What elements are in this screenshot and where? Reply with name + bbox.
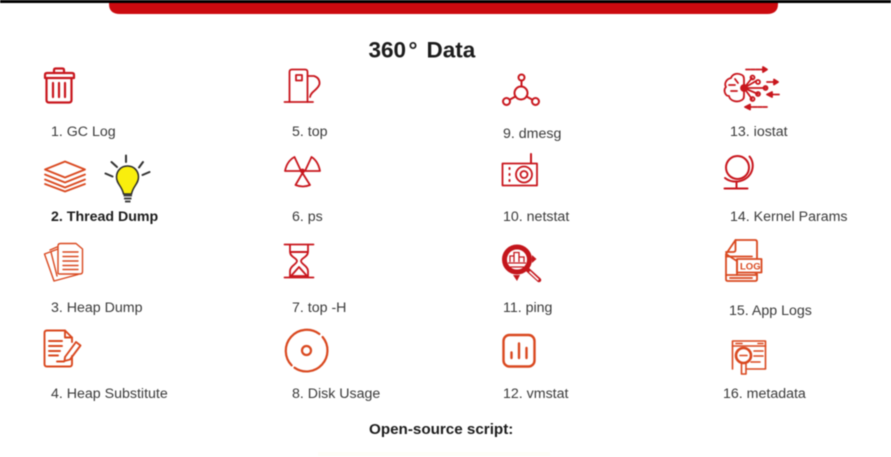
label: 10. netstat — [503, 209, 569, 225]
item 11: ping — [503, 247, 552, 316]
item 12: vmstat — [503, 335, 569, 402]
item 7: top -H — [284, 244, 346, 316]
icon: trash can — [45, 68, 74, 102]
label: 7. top -H — [292, 300, 346, 316]
item 9: dmesg — [503, 74, 561, 142]
icon: three-node network — [503, 74, 539, 105]
label: 6. ps — [292, 209, 323, 225]
item 5: top — [284, 70, 328, 140]
icon: document stack — [44, 244, 82, 281]
icon: magnifier with chart — [504, 247, 539, 281]
item 8: Disk Usage — [286, 330, 380, 402]
item 4: Heap Substitute — [44, 330, 168, 402]
label: 3. Heap Dump — [51, 300, 143, 316]
icon: layers — [45, 162, 85, 192]
title: 360 — [368, 38, 406, 62]
icon: disk — [286, 330, 327, 371]
label: 15. App Logs — [729, 303, 812, 319]
label: 9. dmesg — [503, 126, 561, 142]
icon: radio — [502, 154, 537, 186]
label: 2. Thread Dump — [51, 209, 159, 225]
item 16: metadata — [723, 341, 806, 402]
icon: bar chart tile — [504, 335, 534, 366]
label: 5. top — [292, 124, 328, 140]
item 3: Heap Dump — [44, 244, 143, 316]
label: 1. GC Log — [51, 124, 116, 140]
red header bar — [109, 3, 778, 14]
item 1: GC Log — [45, 68, 116, 140]
label: 14. Kernel Params — [730, 209, 848, 225]
item 6: ps — [285, 157, 323, 225]
icon: fuel pump — [284, 70, 320, 102]
title: Data — [426, 38, 476, 62]
label: 4. Heap Substitute — [51, 386, 168, 402]
label: 11. ping — [503, 300, 552, 316]
icon: light bulb — [106, 156, 150, 202]
title: ° — [408, 38, 418, 62]
label: 16. metadata — [723, 386, 806, 402]
icon: log file: LOG — [740, 262, 761, 272]
icon: browser window with magnifier — [732, 341, 766, 374]
icon: brain with arrows — [725, 67, 779, 110]
item 2: Thread Dump — [45, 156, 159, 225]
label: 12. vmstat — [503, 386, 569, 402]
item 10: netstat — [502, 154, 569, 225]
icon: radiation symbol — [285, 157, 320, 186]
icon: document with pen — [44, 330, 80, 366]
icon: hourglass — [284, 244, 314, 278]
item 15: App Logs — [726, 240, 812, 319]
faint bottom link strip — [318, 452, 550, 456]
item 14: Kernel Params — [724, 156, 848, 225]
open-source script heading: Open-source script: — [369, 421, 513, 438]
icon: desk globe — [724, 156, 753, 188]
item 13: iostat — [725, 67, 788, 140]
label: 8. Disk Usage — [292, 386, 380, 402]
label: 13. iostat — [730, 124, 788, 140]
